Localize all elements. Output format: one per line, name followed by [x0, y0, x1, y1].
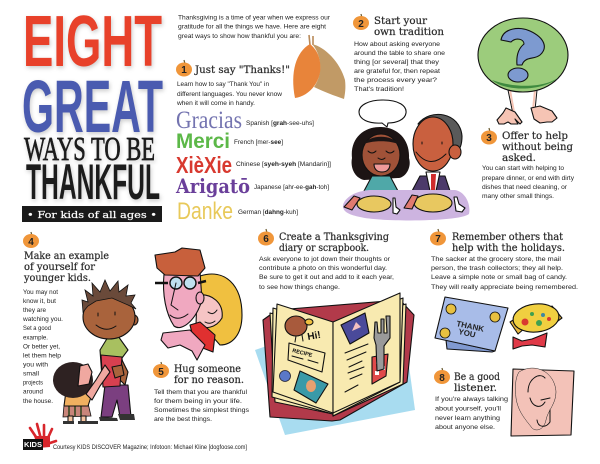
- body 1: when it will come in handy.: [176, 100, 255, 107]
- heading 7: Remember others that: [452, 232, 563, 243]
- illustration: big boy and small child: [53, 280, 138, 424]
- Kids Discover logo: [23, 424, 56, 450]
- body 3: many other small things.: [482, 193, 554, 200]
- Gracias: Spanish [grah-see-uhs]: [246, 120, 314, 127]
- body 4: small: [23, 370, 40, 378]
- illustration: open scrapbook: [255, 293, 415, 435]
- body 1: Learn how to say "Thank You" in: [177, 81, 269, 88]
- body 6: to see how things change.: [259, 284, 340, 291]
- Gracias: Gracias: [176, 107, 242, 134]
- illustration: thank you card: YOU: [458, 327, 477, 340]
- intro text: great ways to show how thankful you are:: [178, 33, 301, 40]
- body 8: about anyone else.: [435, 424, 495, 431]
- recipe card: [288, 343, 325, 372]
- body 7: person, the trash collectors; they all help.: [431, 265, 563, 272]
- section 2: start your own tradition: [353, 14, 445, 93]
- table: [343, 190, 469, 220]
- illustration: couple at the table: [343, 100, 469, 220]
- turkey doodle: Hi!: [307, 330, 322, 343]
- body 4: you with: [23, 362, 48, 368]
- Merci: French [mer-see]: [234, 139, 283, 146]
- Merci: Merci: [176, 130, 230, 153]
- title: [22, 2, 163, 210]
- title: EIGHT: [23, 2, 162, 82]
- body 4: [22, 289, 63, 405]
- pumpkin number 7: 7: [435, 234, 441, 245]
- small child: [53, 362, 110, 424]
- heading 2: [374, 16, 445, 38]
- credit line: Courtesy KIDS DISCOVER Magazine; Infotoon: Michael Kline [dogfoose.com]: [53, 444, 247, 451]
- body 2: [354, 41, 445, 93]
- heading 8: [454, 372, 501, 394]
- intro text: Thanksgiving is a time of year when we express our: [178, 14, 331, 22]
- plates and cutlery: [344, 194, 465, 214]
- section 1: say thanks: [175, 60, 331, 225]
- XieXie: [176, 152, 331, 178]
- Danke: [177, 198, 298, 225]
- subtitle bar: [22, 206, 162, 222]
- intro text: gratitude for all the things we have. Here are eight: [178, 24, 326, 30]
- heading 7: help with the holidays.: [452, 243, 565, 254]
- body 7: [431, 256, 578, 291]
- illustration: man and woman hugging: [155, 248, 242, 360]
- body 8: If you're always talking: [435, 396, 508, 403]
- body 6: [259, 256, 394, 291]
- illustration: thank you card: [435, 297, 508, 352]
- XieXie: XièXie: [176, 152, 232, 178]
- body 2: thing [or several] that they: [354, 59, 440, 66]
- body 5: [154, 389, 250, 423]
- body 2: the process every year?: [354, 77, 437, 84]
- body 5: are the best things.: [154, 416, 212, 423]
- pumpkin number 4: [23, 232, 39, 248]
- body 4: the house.: [23, 398, 53, 405]
- body 6: Be sure to get it out and add to it each year,: [259, 274, 394, 281]
- title: WAYS TO BE: [24, 131, 155, 168]
- heading 1: Just say "Thanks!": [194, 65, 290, 76]
- pumpkin number 2: 2: [358, 19, 364, 30]
- pumpkin number 1: 1: [181, 65, 187, 76]
- Gracias: [176, 107, 314, 134]
- body 7: They will really appreciate being remembered.: [431, 284, 578, 291]
- heading 5: for no reason.: [174, 375, 244, 386]
- heading 5: Hug someone: [174, 364, 241, 375]
- heading 4: Make an example: [24, 251, 109, 262]
- body 4: around: [23, 388, 43, 396]
- illustration: question mark ball: [478, 18, 568, 124]
- Danke: German [dahng-kuh]: [238, 209, 298, 216]
- body 4: example.: [23, 334, 48, 342]
- XieXie: Chinese [syeh-syeh [Mandarin]]: [236, 161, 331, 168]
- heading 6: [279, 232, 390, 254]
- body 8: [435, 396, 508, 431]
- icon: autumn leaves: [293, 35, 345, 99]
- body 4: watching you.: [22, 316, 63, 323]
- body 8: never learn anything: [435, 415, 500, 422]
- section 4: make an example: [22, 232, 109, 405]
- body 2: are grateful for, then repeat: [354, 68, 440, 75]
- heading 3: Offer to help: [502, 131, 568, 142]
- body 2: around the table to share one: [354, 50, 445, 57]
- heading 6: diary or scrapbook.: [279, 243, 369, 254]
- body 3: You can start with helping to: [482, 165, 564, 172]
- Merci: [176, 130, 283, 153]
- body 3: [482, 165, 575, 200]
- recipe card: RECIPE: [292, 348, 313, 359]
- Kids Discover logo: KIDS: [24, 440, 42, 449]
- body 6: contribute a photo on this wonderful day.: [259, 265, 387, 272]
- body 8: about yourself, you'll: [435, 406, 502, 412]
- body 5: Tell them that you are thankful: [154, 389, 248, 396]
- body 1: [176, 81, 282, 107]
- heading 4: of yourself for: [24, 262, 95, 273]
- section 5: hug someone: [153, 362, 250, 423]
- body 4: Set a good: [23, 325, 51, 332]
- body 7: Leave a simple note or small bag of candy.: [431, 274, 567, 281]
- heading 6: Create a Thanksgiving: [279, 232, 390, 243]
- body 4: know it, but: [23, 298, 56, 305]
- body 4: projects: [23, 380, 44, 386]
- flower: [280, 370, 290, 382]
- pumpkin number 7: [430, 229, 446, 246]
- intro text: [178, 14, 331, 40]
- title: GREAT: [22, 65, 163, 148]
- heading 5: [174, 364, 244, 386]
- body 4: Or better yet,: [23, 344, 60, 350]
- body 5: for them being in your life.: [154, 398, 242, 405]
- body 6: Ask everyone to jot down their thoughts or: [259, 256, 391, 263]
- heading 8: Be a good: [454, 372, 501, 383]
- boy: [412, 114, 462, 191]
- body 7: The sacker at the grocery store, the mail: [431, 256, 562, 263]
- illustration: ear: [511, 368, 574, 436]
- body 3: prepare dinner, or end with dirty: [482, 175, 575, 182]
- photo of a hand: [341, 313, 369, 344]
- speech bubble: [359, 100, 406, 127]
- title: THANKFUL: [26, 154, 160, 210]
- illustration: candy: [510, 302, 562, 349]
- body 3: dishes that need cleaning, or: [482, 184, 568, 191]
- heading 7: [452, 232, 565, 254]
- heading 3: [502, 131, 574, 164]
- section 3: offer to help: [481, 128, 575, 200]
- pumpkin number 4: 4: [28, 237, 34, 248]
- heading 4: [23, 251, 109, 284]
- subtitle bar: • For kids of all ages •: [27, 210, 157, 221]
- heading 8: listener.: [454, 383, 497, 394]
- heading 3: without being: [502, 142, 574, 153]
- Danke: Danke: [177, 198, 233, 225]
- Arigato: [175, 174, 329, 198]
- big boy: [82, 280, 138, 421]
- handwriting: [345, 344, 368, 392]
- Arigato: Japanese [ahr-ee-gah-toh]: [254, 184, 329, 191]
- Arigato: Arigatō: [175, 174, 250, 198]
- body 4: You may not: [23, 289, 58, 296]
- heading 2: Start your: [374, 16, 427, 27]
- girl: [352, 127, 410, 191]
- turkey doodle: [285, 316, 322, 343]
- pumpkin number 6: 6: [263, 234, 269, 245]
- pumpkin number 5: 5: [158, 367, 164, 378]
- body 4: they are: [23, 307, 46, 314]
- body 5: Sometimes the simplest things: [154, 407, 250, 414]
- body 4: let them help: [23, 352, 61, 360]
- section 7: remember others: [430, 229, 578, 291]
- body 2: That's tradition!: [354, 86, 404, 93]
- section 8: be a good listener: [434, 368, 508, 431]
- body 1: different languages. You never know: [177, 91, 282, 98]
- heading 2: own tradition: [374, 27, 445, 38]
- photo of a face: [294, 371, 328, 403]
- pumpkin number 1: [176, 60, 192, 76]
- pumpkin number 8: 8: [439, 373, 445, 384]
- heading 3: asked.: [502, 153, 536, 164]
- heading 4: younger kids.: [23, 273, 91, 284]
- body 2: How about asking everyone: [354, 41, 440, 48]
- pumpkin number 3: 3: [486, 133, 492, 144]
- fork and checkered cloth: [372, 316, 390, 384]
- section 6: create a diary: [258, 229, 394, 291]
- illustration: thank you card: THANK: [456, 319, 485, 334]
